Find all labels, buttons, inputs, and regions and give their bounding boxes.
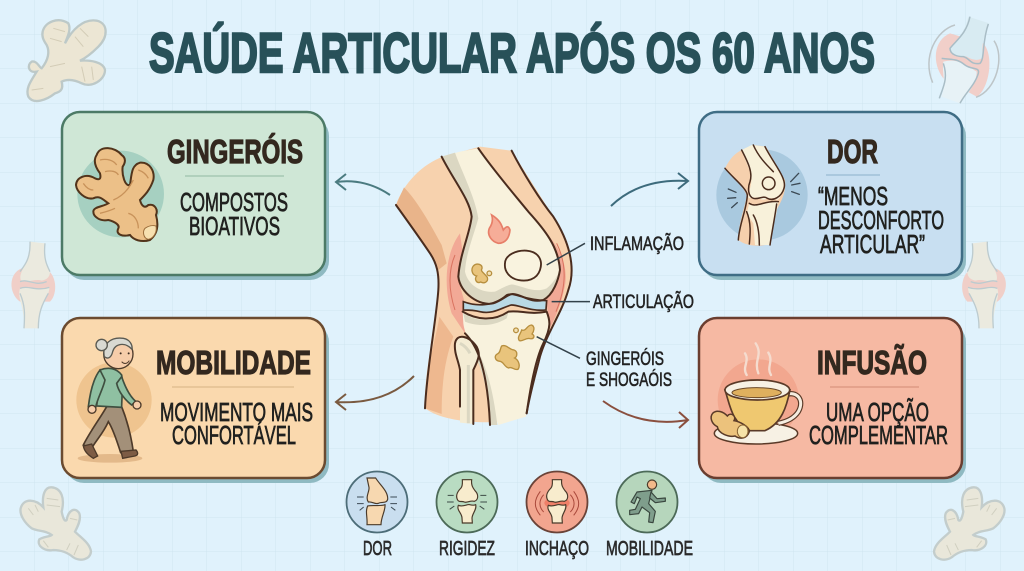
text block <box>818 181 944 259</box>
icon: walking grandmother <box>76 338 152 463</box>
label: dor: DOR <box>363 537 392 560</box>
text block: COMPOSTOS <box>180 187 288 217</box>
panel: gingerois <box>62 112 329 280</box>
patella <box>505 251 541 281</box>
arrow: knee to mobilidade <box>336 376 414 410</box>
icon: faded ginger bottom right <box>934 487 1005 560</box>
label: gingerois e shogaois <box>586 347 672 391</box>
label: mobilidade: MOBILIDADE <box>606 537 693 560</box>
panel: dor <box>699 112 966 280</box>
leader lines <box>537 243 590 358</box>
heading: INFUSÃO <box>817 344 927 381</box>
arrow: knee to infusao <box>603 401 688 428</box>
label: rigidez: RIGIDEZ <box>439 537 495 560</box>
label: inchaco: INCHAÇO <box>525 537 589 560</box>
label: inflamacao: INFLAMAÇÃO <box>590 231 684 255</box>
icon: dor <box>346 472 408 532</box>
icon: rigidez <box>436 472 498 532</box>
text block: UMA OPÇÃO <box>826 397 929 427</box>
heading: MOBILIDADE <box>156 344 311 381</box>
panel: infusao <box>699 318 966 483</box>
text block: “MENOS <box>818 181 888 211</box>
text block <box>809 397 948 450</box>
arrow: knee to dor <box>611 173 688 206</box>
icon: mobilidade runner <box>616 472 678 532</box>
text block <box>160 397 313 450</box>
icon: ginger root <box>76 148 164 241</box>
label: gingerois e shogaois: GINGERÓIS <box>586 347 664 370</box>
icon: cup of ginger tea <box>711 343 801 444</box>
icon: flame <box>489 215 510 243</box>
icon: faded joint left <box>11 242 55 328</box>
text block: COMPLEMENTAR <box>809 420 948 450</box>
text block: ARTICULAR” <box>820 229 925 259</box>
icon: knee pain <box>716 145 808 246</box>
text block <box>180 187 288 241</box>
icon: faded joint top right <box>929 17 999 103</box>
label: gingerois e shogaois: E SHOGAÓIS <box>586 368 672 391</box>
icon: inchaco <box>526 472 588 532</box>
icon: faded ginger bottom left <box>20 487 91 560</box>
icon: faded joint right <box>962 242 1006 328</box>
arrow: knee to gingerois <box>336 174 390 195</box>
text block: DESCONFORTO <box>818 205 944 235</box>
text block: CONFORTÁVEL <box>172 420 296 450</box>
knee anatomy illustration <box>396 147 590 425</box>
label: articulacao: ARTICULAÇÃO <box>593 289 694 313</box>
icon: faded ginger top left <box>27 20 106 101</box>
text block: MOVIMENTO MAIS <box>160 397 313 427</box>
panel: mobilidade <box>62 318 329 483</box>
text block: BIOATIVOS <box>189 211 280 241</box>
heading: DOR <box>827 133 878 170</box>
ginger compound deposits <box>472 264 534 370</box>
heading: GINGERÓIS <box>167 133 303 170</box>
